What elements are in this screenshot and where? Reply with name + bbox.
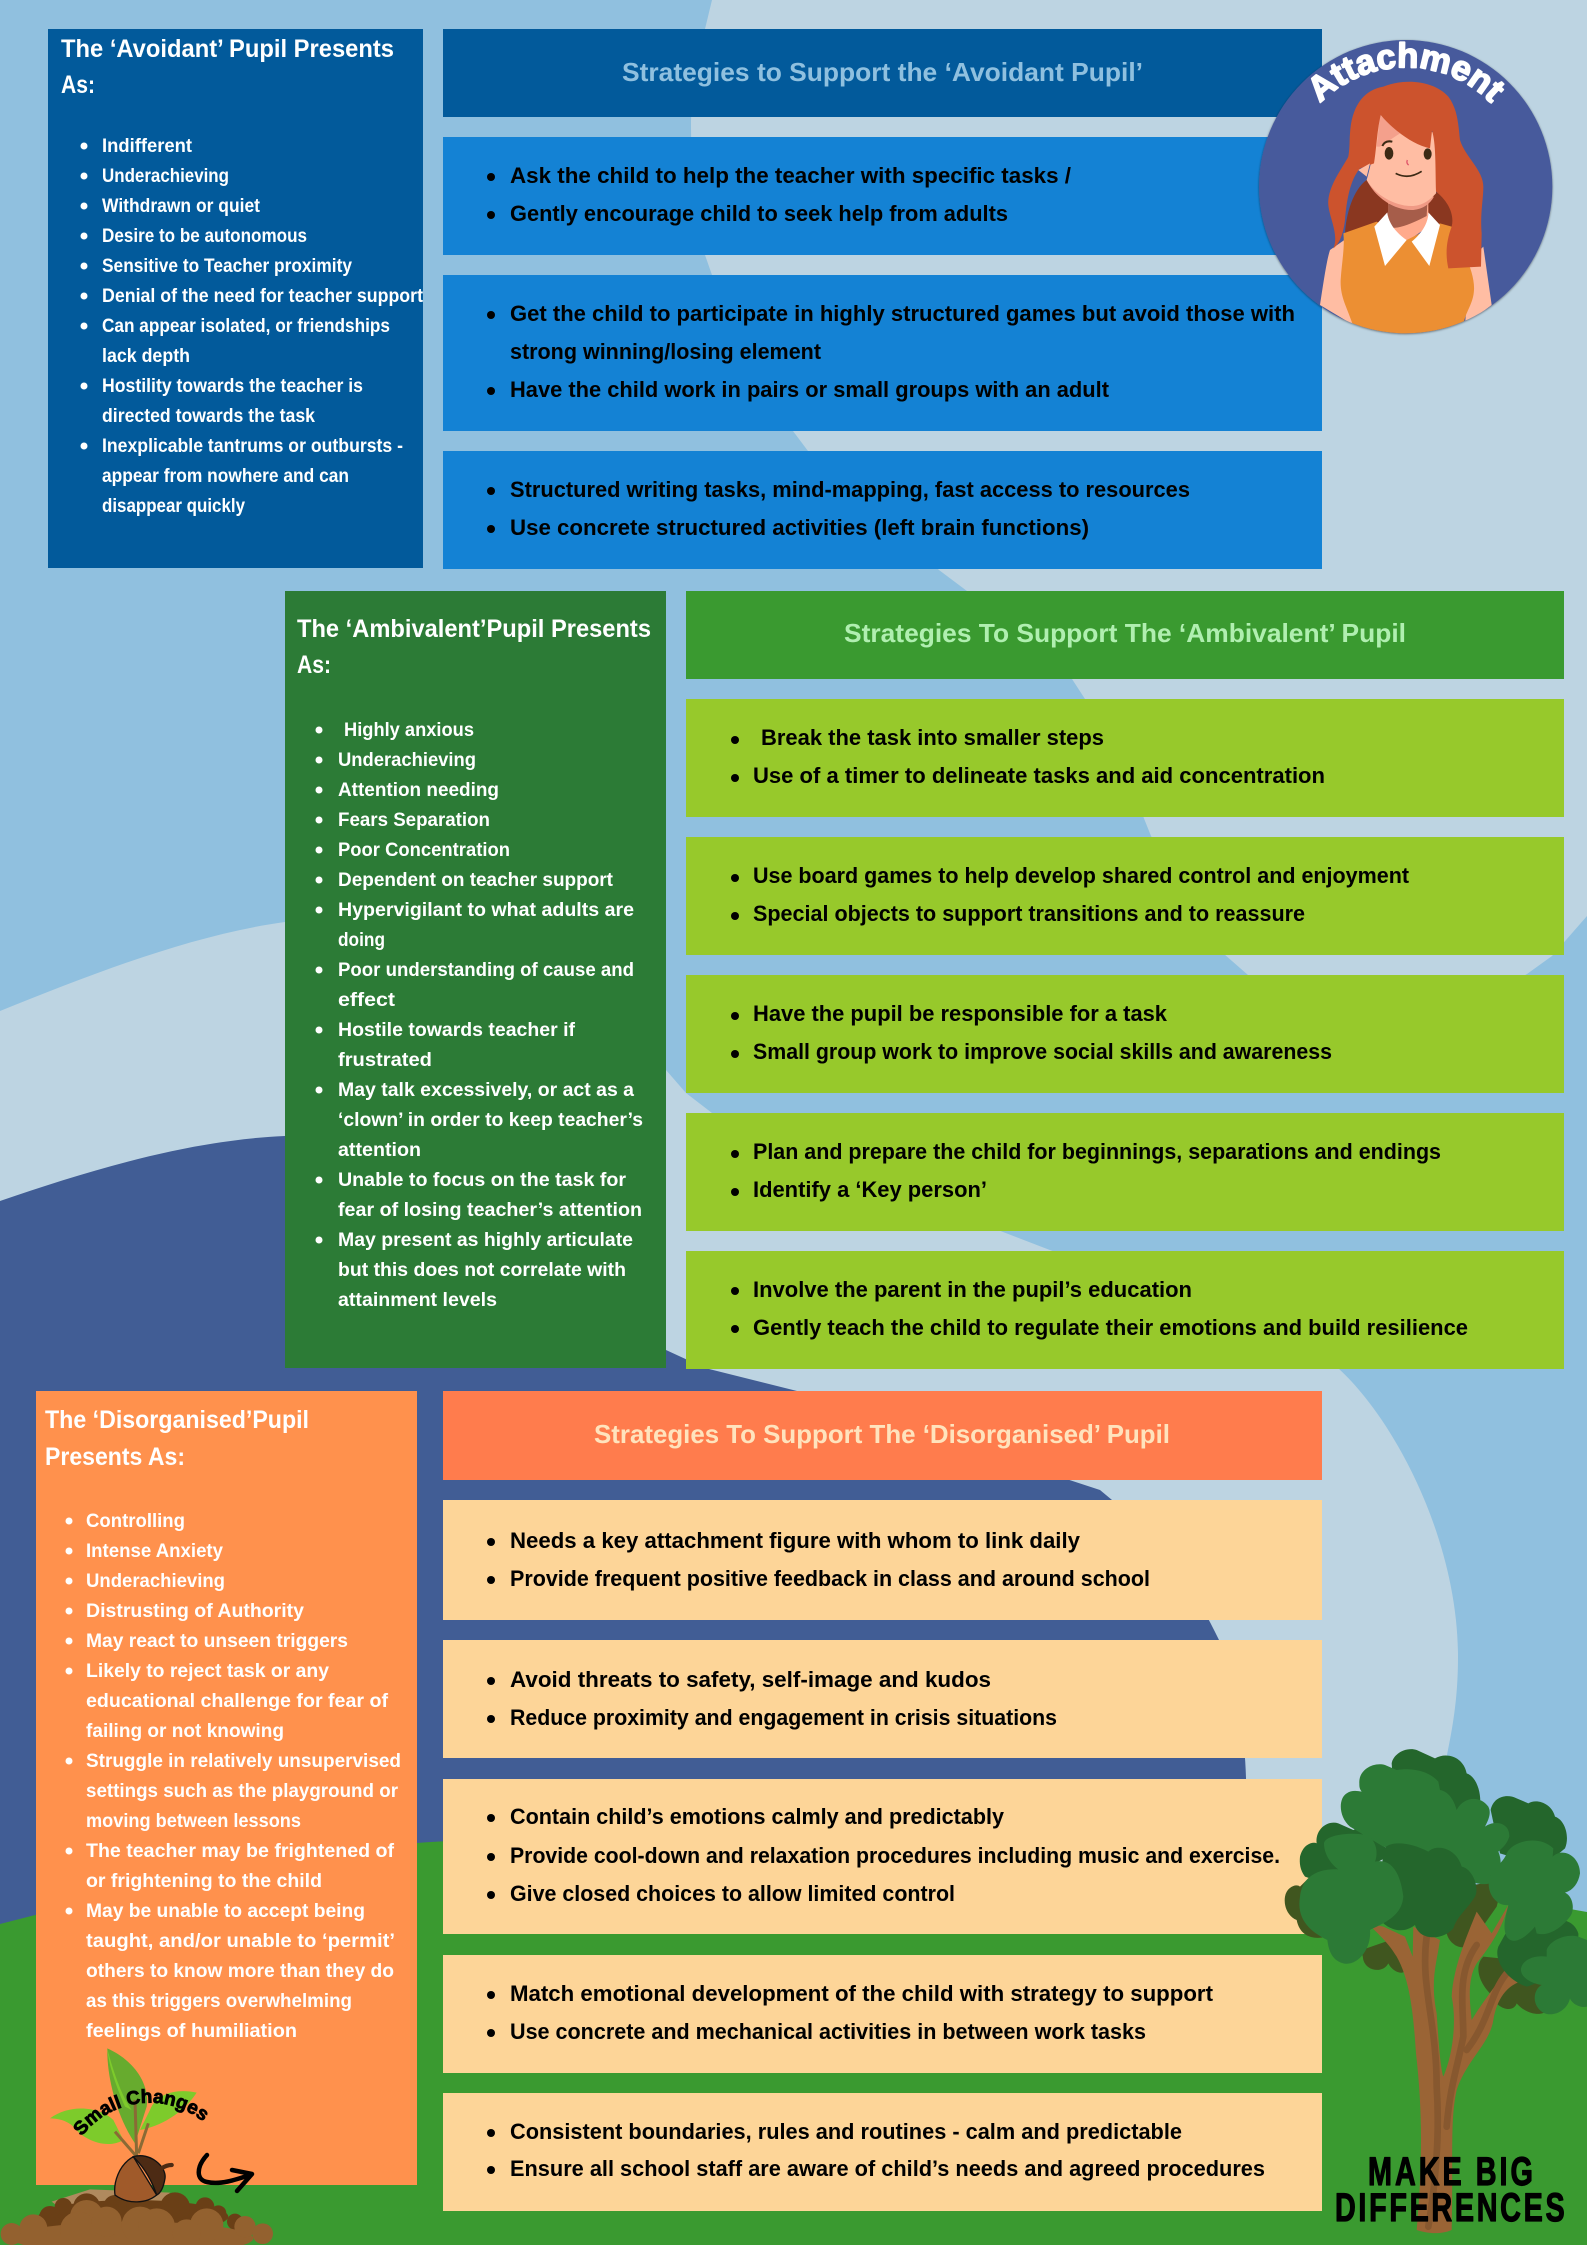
list: ambivalent traits: May present as highly articulate (338, 1229, 633, 1251)
strategy box 3: Have the pupil be responsible for a task (753, 1001, 1168, 1026)
strategy box 3: Contain child’s emotions calmly and predictably (510, 1804, 1005, 1829)
strategy box 4: Plan and prepare the child for beginnings, separations and endings (753, 1139, 1441, 1164)
strategy box 1 (686, 699, 1564, 817)
list: disorganised traits: taught, and/or unable to ‘permit’ (86, 1930, 395, 1952)
strategy box 3: Provide cool-down and relaxation procedures including music and exercise. (510, 1843, 1280, 1868)
badge title: Attachment: Attachment (1310, 41, 1505, 104)
list: disorganised traits: May be unable to accept being (86, 1900, 365, 1922)
background: dark blue hill (0, 1136, 1246, 2000)
strategy box 5 (686, 1251, 1564, 1369)
list: disorganised traits: settings such as the playground or (86, 1780, 398, 1802)
list: ambivalent traits: attention (338, 1139, 421, 1161)
list: disorganised traits: Struggle in relatively unsupervised (86, 1750, 401, 1772)
list: avoidant traits: Underachieving (102, 165, 229, 187)
strategy box 3 (443, 1779, 1322, 1934)
list: disorganised traits: moving between lessons (86, 1810, 301, 1832)
arrow: small changes to big differences (199, 2155, 252, 2191)
label: make big differences (1335, 2149, 1565, 2230)
list: ambivalent traits: Poor Concentration (338, 839, 510, 861)
list: ambivalent traits: frustrated (338, 1049, 432, 1071)
strategy box 1: Break the task into smaller steps (761, 725, 1104, 750)
list: ambivalent traits: Highly anxious (344, 719, 474, 741)
header: ambivalent strategies: Strategies To Support The ‘Ambivalent’ Pupil (844, 618, 1406, 648)
list: ambivalent traits: Fears Separation (338, 809, 490, 831)
list: avoidant traits: appear from nowhere and can (102, 465, 349, 487)
icon: acorn sprout with soil (1, 2048, 273, 2245)
label: make big differences: DIFFERENCES (1335, 2185, 1565, 2230)
list: avoidant traits: directed towards the task (102, 405, 315, 427)
strategy box 2: Get the child to participate in highly structured games but avoid those with (510, 301, 1295, 326)
list: disorganised traits: or frightening to the child (86, 1870, 322, 1892)
list: disorganised traits: failing or not knowing (86, 1720, 284, 1742)
strategy box 1: Provide frequent positive feedback in class and around school (510, 1566, 1150, 1591)
strategy box 4 (686, 1113, 1564, 1231)
list: ambivalent traits: effect (338, 989, 396, 1011)
list: disorganised traits: Intense Anxiety (86, 1540, 223, 1562)
strategy box 4 (443, 1955, 1322, 2073)
strategy box 5: Involve the parent in the pupil’s education (753, 1277, 1192, 1302)
header: avoidant strategies: Strategies to Support the ‘Avoidant Pupil’ (622, 57, 1143, 87)
strategy box 2: Use board games to help develop shared control and enjoyment (753, 863, 1410, 888)
background: pale hill (0, 921, 1458, 2000)
list: ambivalent traits: but this does not correlate with (338, 1259, 626, 1281)
strategy box 2 (686, 837, 1564, 955)
heading: ambivalent presents: The ‘Ambivalent’Pupil Presents (297, 615, 651, 643)
strategy box 2 (443, 275, 1322, 431)
strategy box 2: Have the child work in pairs or small groups with an adult (510, 377, 1110, 402)
heading: disorganised presents: The ‘Disorganised’Pupil (45, 1406, 309, 1434)
heading: avoidant presents: The ‘Avoidant’ Pupil Presents (61, 35, 394, 63)
strategy box 1 (443, 137, 1322, 255)
strategy box 1 (443, 1500, 1322, 1620)
panel: avoidant strategies (443, 29, 1322, 569)
list: avoidant traits: lack depth (102, 345, 190, 367)
strategy box 4: Identify a ‘Key person’ (753, 1177, 987, 1202)
strategy box 5: Consistent boundaries, rules and routines - calm and predictable (510, 2119, 1182, 2144)
list: disorganised traits: as this triggers overwhelming (86, 1990, 352, 2012)
strategy box 3 (686, 975, 1564, 1093)
list: ambivalent traits: Underachieving (338, 749, 476, 771)
list: avoidant traits: Denial of the need for teacher support (102, 285, 423, 307)
list: disorganised traits: Controlling (86, 1510, 185, 1532)
list: disorganised traits: feelings of humiliation (86, 2020, 297, 2042)
panel: ambivalent strategies (686, 591, 1564, 1369)
list: avoidant traits: Sensitive to Teacher proximity (102, 255, 352, 277)
strategy box 3: Structured writing tasks, mind-mapping, fast access to resources (510, 477, 1190, 502)
list: disorganised traits: May react to unseen triggers (86, 1630, 348, 1652)
strategy box 3 (443, 451, 1322, 569)
strategy box 3: Give closed choices to allow limited control (510, 1881, 955, 1906)
list: ambivalent traits: Hostile towards teacher if (338, 1019, 575, 1041)
strategy box 1: Gently encourage child to seek help from adults (510, 201, 1008, 226)
icon: tree (1285, 1749, 1587, 2233)
strategy box 5 (443, 2093, 1322, 2211)
strategy box 4: Use concrete and mechanical activities in between work tasks (510, 2019, 1146, 2044)
list: disorganised traits: Distrusting of Authority (86, 1600, 304, 1622)
list: avoidant traits: disappear quickly (102, 495, 245, 517)
list: avoidant traits: Hostility towards the teacher is (102, 375, 363, 397)
list: ambivalent traits: Dependent on teacher support (338, 869, 613, 891)
header: ambivalent strategies (686, 591, 1564, 679)
list: disorganised traits (66, 1510, 401, 2042)
list: disorganised traits: educational challenge for fear of (86, 1690, 388, 1712)
list: ambivalent traits: Poor understanding of cause and (338, 959, 634, 981)
list: disorganised traits: others to know more than they do (86, 1960, 394, 1982)
strategy box 3: Small group work to improve social skills and awareness (753, 1039, 1332, 1064)
strategy box 1: Use of a timer to delineate tasks and aid concentration (753, 763, 1325, 788)
list: disorganised traits: Likely to reject task or any (86, 1660, 329, 1682)
strategy box 5: Ensure all school staff are aware of child’s needs and agreed procedures (510, 2156, 1265, 2181)
list: ambivalent traits: Attention needing (338, 779, 499, 801)
list: ambivalent traits: fear of losing teacher’s attention (338, 1199, 642, 1221)
strategy box 2: Avoid threats to safety, self-image and kudos (510, 1667, 991, 1692)
strategy box 3: Use concrete structured activities (left brain functions) (510, 515, 1089, 540)
list: ambivalent traits: doing (338, 929, 385, 951)
panel: avoidant pupil presents as (48, 29, 423, 568)
icon: attachment girl badge (1258, 39, 1554, 336)
list: avoidant traits: Inexplicable tantrums or outbursts - (102, 435, 403, 457)
list: avoidant traits: Indifferent (102, 135, 192, 157)
list: ambivalent traits: Unable to focus on the task for (338, 1169, 626, 1191)
heading line two: As: (297, 651, 331, 679)
panel: disorganised pupil presents as (36, 1391, 417, 2185)
strategy box 2 (443, 1640, 1322, 1758)
list: avoidant traits: Withdrawn or quiet (102, 195, 260, 217)
strategy box 1: Needs a key attachment figure with whom to link daily (510, 1528, 1081, 1553)
heading line two: As: (61, 71, 95, 99)
background: green hill (0, 1838, 1587, 2245)
label: Small Changes: Small Changes (74, 2088, 208, 2135)
background: upper right pale shape (691, 0, 1587, 990)
strategy box 2: strong winning/losing element (510, 339, 822, 364)
panel: disorganised strategies (443, 1391, 1322, 2211)
panel: ambivalent pupil presents as (285, 591, 666, 1368)
strategy box 2: Reduce proximity and engagement in crisis situations (510, 1705, 1057, 1730)
list: disorganised traits: Underachieving (86, 1570, 225, 1592)
strategy box 5: Gently teach the child to regulate their emotions and build resilience (753, 1315, 1468, 1340)
header: disorganised strategies (443, 1391, 1322, 1480)
list: ambivalent traits: May talk excessively, or act as a (338, 1079, 634, 1101)
strategy box 1: Ask the child to help the teacher with specific tasks / (510, 163, 1071, 188)
list: avoidant traits: Can appear isolated, or friendships (102, 315, 390, 337)
list: disorganised traits: The teacher may be frightened of (86, 1840, 395, 1862)
list: ambivalent traits (316, 719, 643, 1311)
label: make big differences: MAKE BIG (1368, 2149, 1533, 2194)
list: ambivalent traits: Hypervigilant to what adults are (338, 899, 634, 921)
header: avoidant strategies (443, 29, 1322, 117)
strategy box 4: Match emotional development of the child with strategy to support (510, 1981, 1214, 2006)
list: ambivalent traits: ‘clown’ in order to keep teacher’s (338, 1109, 643, 1131)
list: ambivalent traits: attainment levels (338, 1289, 497, 1311)
strategy box 2: Special objects to support transitions and to reassure (753, 901, 1305, 926)
list: avoidant traits (80, 135, 423, 517)
heading line two: Presents As: (45, 1443, 185, 1471)
list: avoidant traits: Desire to be autonomous (102, 225, 307, 247)
header: disorganised strategies: Strategies To Support The ‘Disorganised’ Pupil (594, 1419, 1170, 1449)
